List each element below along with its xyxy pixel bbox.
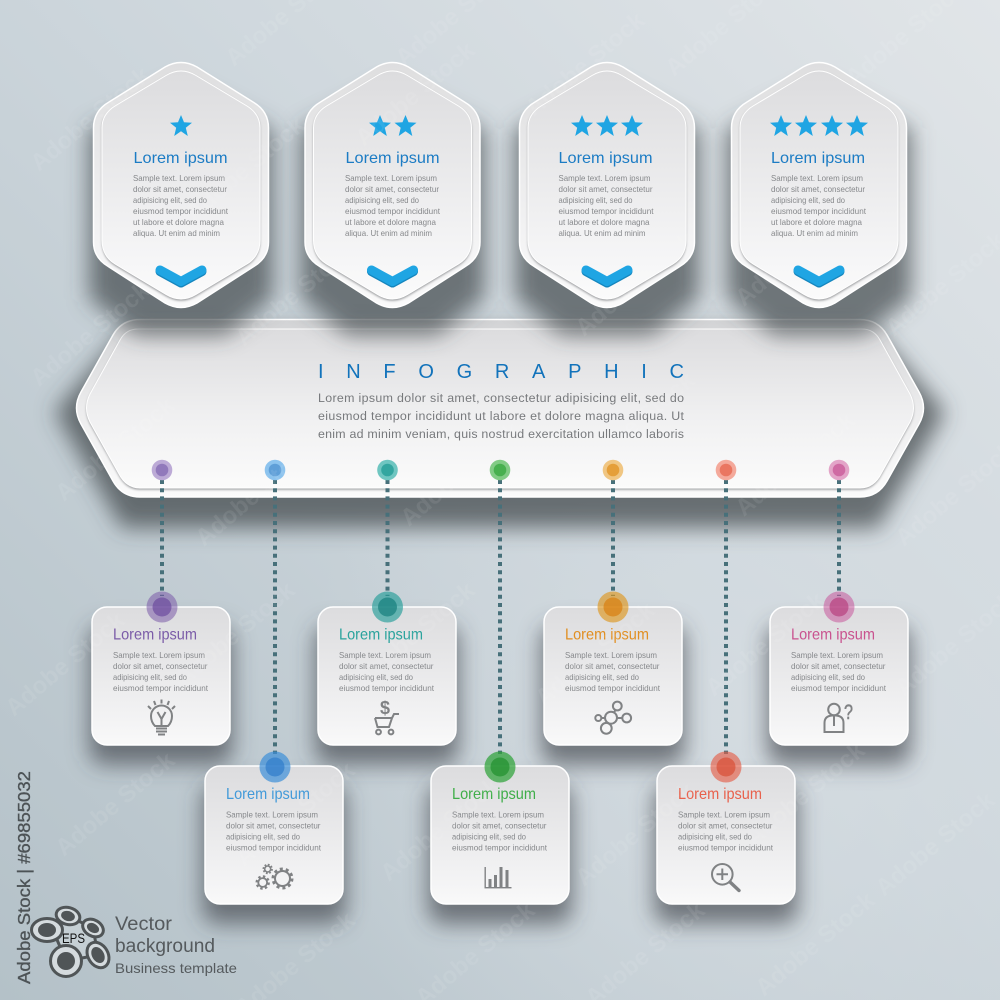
icon: dollar cart xyxy=(375,698,399,734)
heading: Lorem ipsum xyxy=(791,626,875,644)
watermarks: Adobe Stock xyxy=(395,416,526,532)
heading: Lorem ipsum xyxy=(113,626,197,644)
card: pink person question xyxy=(767,607,911,765)
text block: eiusmod tempor incididunt xyxy=(133,206,229,216)
text block: aliqua. Ut enim ad minim xyxy=(133,228,220,238)
card dots xyxy=(146,592,854,782)
icon: star rating xyxy=(170,115,192,136)
text block: adipisicing elit, sed do xyxy=(565,672,639,682)
watermarks: Adobe Stock xyxy=(25,61,156,177)
icon: chevron xyxy=(372,270,414,283)
text block: eiusmod tempor incididunt xyxy=(339,683,435,693)
text block xyxy=(565,650,661,693)
text block: adipisicing elit, sed do xyxy=(226,832,300,842)
text block: Sample text. Lorem ipsum xyxy=(452,810,544,820)
panel: hexagon two stars xyxy=(300,62,484,335)
heading: Lorem ipsum xyxy=(134,150,228,167)
text block xyxy=(452,810,548,852)
watermarks: Adobe Stock xyxy=(0,606,131,722)
text block: dolor sit amet, consectetur xyxy=(771,184,865,194)
watermarks: Adobe Stock xyxy=(870,786,1000,902)
text block: ut labore et dolore magna xyxy=(558,217,650,227)
dashed connectors xyxy=(162,480,839,754)
watermarks: Adobe Stock xyxy=(350,576,481,692)
text block: eiusmod tempor incididunt xyxy=(565,683,661,693)
text block: aliqua. Ut enim ad minim xyxy=(558,228,646,238)
text block: Sample text. Lorem ipsum xyxy=(565,650,657,660)
heading: Lorem ipsum xyxy=(565,626,649,644)
text block: Sample text. Lorem ipsum xyxy=(771,173,863,183)
heading: Lorem ipsum xyxy=(226,786,310,803)
banner dots xyxy=(152,460,849,480)
text block: dolor sit amet, consectetur xyxy=(558,184,653,194)
watermarks: Adobe Stock xyxy=(740,736,871,852)
logo: EPS badge: EPS xyxy=(62,930,85,946)
text block: eiusmod tempor incididunt xyxy=(558,206,654,216)
icon: light bulb xyxy=(148,700,175,734)
text block: Sample text. Lorem ipsum xyxy=(345,173,437,183)
text block xyxy=(678,810,774,852)
watermarks: Adobe Stock xyxy=(180,111,311,227)
text block: vector background caption: Business template xyxy=(115,960,237,976)
stock id label: Adobe Stock | #69855032 xyxy=(14,771,34,984)
text block: vector background caption: background xyxy=(115,936,215,957)
watermarks: Adobe Stock xyxy=(750,886,881,1000)
text block: eiusmod tempor incididunt xyxy=(113,683,209,693)
icon: star rating xyxy=(571,115,643,136)
watermarks: Adobe Stock xyxy=(570,366,701,482)
heading: Lorem ipsum xyxy=(771,150,865,167)
icon: dollar cart: $ xyxy=(380,698,390,718)
watermarks: Adobe Stock xyxy=(190,436,321,552)
icon: person with question mark: ? xyxy=(844,701,853,724)
text block: ut labore et dolore magna xyxy=(771,217,862,227)
text block: vector background caption xyxy=(115,914,237,976)
logo: EPS badge xyxy=(32,905,113,976)
text block: ut labore et dolore magna xyxy=(345,217,436,227)
watermarks: Adobe Stock xyxy=(375,771,506,887)
text block: dolor sit amet, consectetur xyxy=(345,184,439,194)
text block: adipisicing elit, sed do xyxy=(345,195,419,205)
watermarks: Adobe Stock xyxy=(350,36,481,152)
text block: dolor sit amet, consectetur xyxy=(452,820,547,830)
watermarks: Adobe Stock xyxy=(50,391,181,507)
text block: eiusmod tempor incididunt xyxy=(791,683,887,693)
card: green chart xyxy=(428,766,572,924)
heading: infographic: INFOGRAPHIC xyxy=(318,361,684,383)
text block: eiusmod tempor incididunt xyxy=(345,206,441,216)
icon: star rating xyxy=(369,115,416,136)
text block xyxy=(771,173,867,238)
heading: Lorem ipsum xyxy=(346,150,440,167)
panel: main infographic banner xyxy=(55,320,945,528)
icon: chevron xyxy=(160,270,202,283)
watermarks: Adobe Stock xyxy=(570,226,701,342)
heading: Lorem ipsum xyxy=(452,786,536,803)
text block: banner description: enim ad minim veniam, quis nostrud exercitation ullamco laboris xyxy=(318,427,684,441)
text block xyxy=(133,173,229,238)
watermarks: Adobe Stock xyxy=(570,776,701,892)
watermarks: Adobe Stock xyxy=(730,196,861,312)
text block: aliqua. Ut enim ad minim xyxy=(771,228,858,238)
watermarks: Adobe Stock xyxy=(730,406,861,522)
icon: chevron xyxy=(586,270,628,283)
text block: dolor sit amet, consectetur xyxy=(678,820,773,830)
text block: adipisicing elit, sed do xyxy=(678,832,752,842)
panel: hexagon four stars xyxy=(727,62,911,335)
text block xyxy=(558,173,654,238)
text block: dolor sit amet, consectetur xyxy=(791,661,886,671)
watermarks: Adobe Stock xyxy=(230,236,361,352)
card: orange molecule xyxy=(541,607,685,765)
watermarks: Adobe Stock xyxy=(25,276,156,392)
text block: Sample text. Lorem ipsum xyxy=(791,650,883,660)
watermarks: Adobe Stock xyxy=(520,6,651,122)
watermarks: Adobe Stock xyxy=(50,746,181,862)
text block xyxy=(113,650,209,693)
text block: adipisicing elit, sed do xyxy=(339,672,413,682)
text block xyxy=(791,650,887,693)
text block: eiusmod tempor incididunt xyxy=(452,842,548,852)
text block: Sample text. Lorem ipsum xyxy=(133,173,225,183)
text block: banner description: Lorem ipsum dolor sit amet, consectetur adipisicing elit, sed do xyxy=(318,391,684,405)
text block: Sample text. Lorem ipsum xyxy=(339,650,431,660)
heading: Lorem ipsum xyxy=(339,626,423,644)
panel: hexagon three stars xyxy=(515,62,699,335)
watermarks: Adobe Stock xyxy=(170,576,301,692)
text block: adipisicing elit, sed do xyxy=(771,195,845,205)
heading: Lorem ipsum xyxy=(558,150,652,167)
text block: adipisicing elit, sed do xyxy=(133,195,207,205)
text block xyxy=(226,810,322,852)
text block: adipisicing elit, sed do xyxy=(558,195,633,205)
text block: dolor sit amet, consectetur xyxy=(113,661,208,671)
icon: gears xyxy=(257,865,292,888)
text block: Sample text. Lorem ipsum xyxy=(558,173,650,183)
card: blue gears xyxy=(202,766,346,924)
text block: Sample text. Lorem ipsum xyxy=(113,650,205,660)
text block: adipisicing elit, sed do xyxy=(791,672,865,682)
icon: magnifier xyxy=(712,864,739,890)
text block: adipisicing elit, sed do xyxy=(113,672,187,682)
text block: adipisicing elit, sed do xyxy=(452,832,526,842)
text block: dolor sit amet, consectetur xyxy=(565,661,660,671)
card: teal shopping xyxy=(315,607,459,765)
text block: dolor sit amet, consectetur xyxy=(133,184,227,194)
card: purple idea xyxy=(89,607,233,765)
icon: chevron xyxy=(798,270,840,283)
icon: person with question mark xyxy=(824,701,853,732)
text block xyxy=(339,650,435,693)
text block: eiusmod tempor incididunt xyxy=(226,842,322,852)
text block: eiusmod tempor incididunt xyxy=(678,842,774,852)
text block: eiusmod tempor incididunt xyxy=(771,206,867,216)
text block: dolor sit amet, consectetur xyxy=(226,820,321,830)
icon: star rating xyxy=(770,115,868,136)
icon: bar chart xyxy=(484,867,512,888)
watermarks: Adobe Stock xyxy=(230,756,361,872)
panel: hexagon one star xyxy=(89,62,273,335)
icon: molecule xyxy=(595,702,631,734)
text block: Sample text. Lorem ipsum xyxy=(226,810,318,820)
text block: Sample text. Lorem ipsum xyxy=(678,810,770,820)
text block: ut labore et dolore magna xyxy=(133,217,224,227)
watermarks: Adobe Stock xyxy=(700,586,831,702)
text block: vector background caption: Vector xyxy=(115,914,173,935)
text block: banner description: eiusmod tempor incididunt ut labore et dolore magna aliqua. Ut xyxy=(318,409,685,423)
text block xyxy=(345,173,441,238)
watermarks: Adobe Stock xyxy=(530,596,661,712)
card: coral magnifier xyxy=(654,766,798,924)
text block: dolor sit amet, consectetur xyxy=(339,661,434,671)
text block: banner description xyxy=(318,391,685,441)
heading: Lorem ipsum xyxy=(678,786,762,803)
text block: aliqua. Ut enim ad minim xyxy=(345,228,432,238)
